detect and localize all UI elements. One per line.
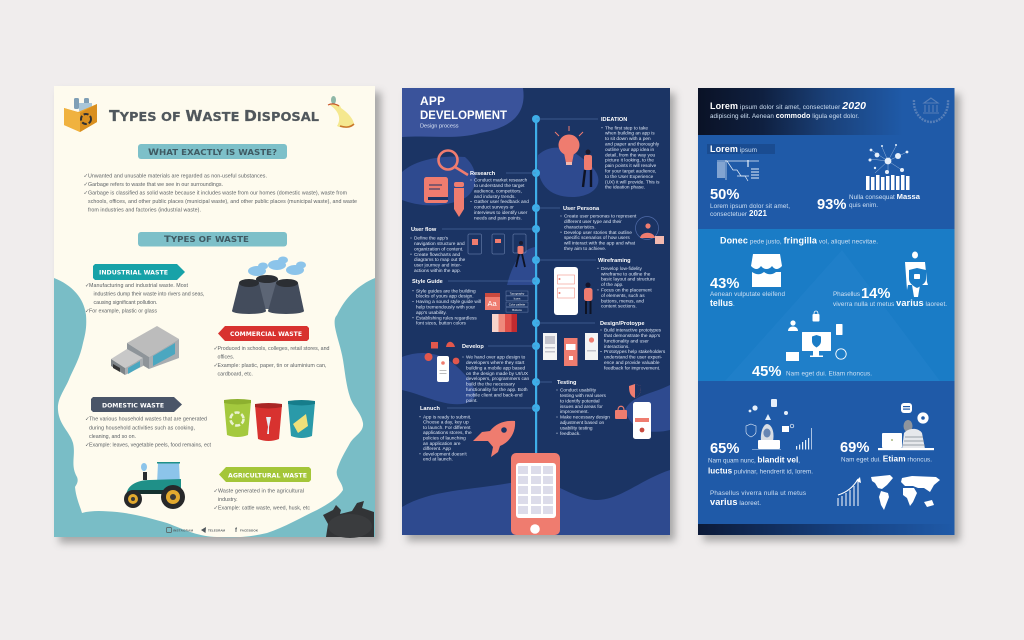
- step: testing: Make necessary design: [560, 415, 610, 421]
- step: user persona: specific scenarios of how users: [564, 235, 630, 241]
- stat: 14 percent: 14%: [861, 286, 890, 302]
- text block: what is waste bullets: schools, offices, and other public places (municipal waste), and other public places (municipal waste), and waste: [88, 199, 357, 205]
- step: user flow: actions within the app.: [414, 268, 461, 274]
- stat: 65 percent: 65%: [710, 441, 739, 457]
- stat: 50 percent: Lorem ipsum dolor sit amet,: [710, 203, 790, 210]
- step: research: and industry trends.: [474, 194, 516, 200]
- icon: style guide swatches: Aa: [488, 299, 498, 308]
- step: user persona: they aim to achieve.: [564, 246, 606, 252]
- step: research: to understand the target: [474, 183, 525, 189]
- text block: commercial waste: Produced in schools, colleges, retail stores, and: [218, 346, 330, 352]
- step: design prototype: interactions.: [604, 344, 630, 350]
- step: develop: We hand over app design to: [466, 355, 526, 361]
- panel: app development: [402, 88, 670, 535]
- icon: large smartphone: [511, 453, 560, 535]
- heading: types of waste: [138, 232, 287, 246]
- step: user persona: characteristics.: [564, 224, 596, 230]
- icon: develop phone and platforms: [424, 342, 459, 382]
- step: launch: an application are: [423, 441, 461, 447]
- icon: market stall: [751, 254, 782, 287]
- stat: 69 percent: 69%: [840, 440, 869, 456]
- step: user flow: Define the app's: [414, 236, 449, 242]
- step: design prototype: functionality and user: [604, 338, 649, 344]
- step: research: Research: [470, 171, 496, 177]
- text block: domestic waste: Example: leaves, vegetable peels, food remains, ect: [89, 442, 212, 448]
- timeline: [442, 115, 598, 454]
- step: style guide: [412, 279, 481, 327]
- text block: agricultural waste: ✓: [214, 506, 218, 512]
- list bullets for every step: [410, 127, 603, 454]
- stat: 45 percent: Nam eget dui. Etiam rhoncus.: [786, 371, 872, 378]
- step: user flow: user journey and inter-: [414, 263, 462, 269]
- step: launch: end at launch.: [423, 457, 453, 463]
- icon: style guide swatches: Typography: [510, 291, 525, 295]
- step: wireframing: Develop low-fidelity: [601, 266, 643, 272]
- step: launch: [420, 406, 472, 463]
- step: wireframing: of elements, such as: [601, 293, 645, 299]
- ribbon: commercial waste: COMMERCIAL WASTE: [230, 331, 302, 338]
- icon: apple core: [328, 96, 354, 127]
- step: develop: building a mobile app based: [466, 365, 526, 371]
- text block: industrial waste: ✓: [85, 283, 89, 289]
- section label: [707, 144, 775, 154]
- social footer: FACEBOOK: [240, 529, 259, 533]
- stat: 14 percent: viverra nulla ut metus varius laoreet.: [833, 298, 947, 308]
- stat: 43 percent: tellus.: [710, 298, 735, 308]
- text block: commercial waste: ✓: [214, 346, 218, 352]
- step: ideation: pain points it will resolve: [605, 163, 657, 169]
- step: ideation: and paper and thoroughly: [605, 142, 660, 148]
- step: ideation: the ideation phase.: [605, 185, 645, 191]
- title: [420, 94, 508, 130]
- ribbon: industrial waste: INDUSTRIAL WASTE: [99, 270, 168, 276]
- text block: agricultural waste: [214, 488, 310, 512]
- step: wireframing: Focus on the placement: [601, 288, 652, 294]
- icon: rising bars with arrow: [838, 477, 861, 506]
- step: design prototype: [600, 321, 666, 371]
- text block: agricultural waste: Example: cattle waste, weed, husk, etc: [218, 506, 310, 512]
- icon: hacker with laptop: [746, 399, 794, 450]
- step: launch: development doesn't: [423, 451, 467, 457]
- step: research: audience, competitors,: [474, 188, 522, 194]
- step: launch: Lanuch: [420, 406, 440, 412]
- icon: green recycling bin: [224, 399, 251, 437]
- icon: red glass bin: [255, 403, 282, 441]
- step: ideation: (UX) it will provide. This is: [605, 179, 660, 185]
- stat: 93 percent: 93%: [817, 197, 846, 213]
- icon: wireframe phone and person: [554, 267, 592, 315]
- icon: style guide swatches: Buttons: [512, 308, 522, 312]
- stat: 14 percent: [833, 286, 947, 308]
- heading: donec line: Donec pede justo, fringilla vol, aliquet necvitae.: [720, 236, 878, 246]
- panel: types of waste disposal: [54, 86, 375, 538]
- step: user flow: diagrams to map out the: [414, 257, 466, 263]
- text block: what is waste bullets: ✓: [84, 182, 88, 188]
- text block: domestic waste: [85, 417, 212, 448]
- text block: industrial waste: [85, 283, 204, 315]
- stat: 14 percent: Phasellus: [833, 291, 860, 298]
- step: user flow: Create flowcharts and: [414, 252, 461, 258]
- step: user persona: [563, 206, 637, 252]
- text block: what is waste bullets: from industries and factories (industrial waste).: [88, 208, 201, 214]
- step: user flow: [411, 227, 466, 274]
- step: testing: usability testing: [560, 425, 593, 431]
- text block: industrial waste: For example, plastic or glass: [89, 309, 157, 315]
- stat: 50 percent: consectetuer 2021: [710, 209, 768, 218]
- step: user persona: Develop user stories that outline: [564, 230, 632, 236]
- step: research: conduct surveys or: [474, 205, 514, 211]
- text block: agricultural waste: ✓: [214, 488, 218, 494]
- step: wireframing: wireframe to outline the: [601, 271, 651, 277]
- step: user flow: organization of content.: [414, 246, 463, 252]
- stat: 69 percent: [840, 440, 932, 464]
- text block: commercial waste: [214, 346, 330, 378]
- title: TYPES OF WASTE DISPOSAL: [109, 107, 319, 125]
- step: wireframing: Wireframing: [598, 258, 631, 264]
- text block: commercial waste: offices.: [218, 355, 234, 361]
- step: design prototype: Design/Protoype: [600, 321, 644, 327]
- step: design prototype: that demonstrate the app's: [604, 333, 661, 339]
- step: research: needs and pain points.: [474, 215, 522, 221]
- step: user persona: different user type and their: [564, 219, 622, 225]
- stat: 50 percent: 50%: [710, 187, 739, 203]
- step: testing: [557, 380, 610, 437]
- step: ideation: [601, 117, 660, 191]
- step: ideation: for your target audience,: [605, 168, 656, 174]
- icon: style guide swatches: Icons: [514, 296, 521, 300]
- section label: Lorem ipsum: [710, 144, 757, 154]
- step: launch: Choose a day, key up: [423, 420, 469, 426]
- step: wireframing: buttons, menus, and: [601, 298, 644, 304]
- ribbon: industrial waste: [93, 264, 185, 280]
- text block: what is waste bullets: Unwanted and unusable materials are regarded as non-useful substances.: [88, 174, 267, 180]
- stat: 50 percent: [710, 187, 790, 218]
- panel shadows: [59, 92, 960, 543]
- title: DEVELOPMENT: [420, 108, 508, 122]
- step: user persona: will interact with the app and what: [564, 241, 636, 247]
- title: APP: [420, 94, 445, 108]
- text block: industrial waste: ✓: [85, 309, 89, 315]
- icon: rocket: [473, 421, 515, 457]
- step: style guide: Having a sound style guide will: [416, 299, 481, 305]
- text block: commercial waste: ✓: [214, 363, 218, 369]
- step: testing: to identify potential: [560, 398, 600, 404]
- teal wavy background: [54, 278, 375, 537]
- icon: world map: [871, 475, 940, 510]
- step: testing: issues and areas for: [560, 404, 603, 410]
- icon: isometric building: [111, 326, 179, 375]
- header band: [698, 88, 954, 135]
- step: style guide: blocks of yours app design.: [416, 294, 474, 300]
- step: testing: improvement.: [560, 409, 589, 415]
- text block: agricultural waste: industry.: [218, 497, 238, 503]
- step: research: [470, 171, 529, 221]
- stat: 43 percent: Aenean vulputate eleifend: [710, 291, 785, 298]
- panel: blue lorem ipsum statistics: [698, 88, 954, 535]
- stat: 65 percent: Nam quam nunc, blandit vel,: [708, 454, 800, 464]
- icon: flow screens and person: [468, 234, 526, 267]
- step: user flow: User flow: [411, 227, 437, 233]
- faint triangle in middle band: [725, 250, 940, 381]
- icon: small bar chart: [796, 428, 812, 450]
- step: wireframing: content sections.: [601, 304, 637, 310]
- step: develop: point.: [466, 398, 478, 404]
- text block: phasellus: varius laoreet.: [710, 497, 761, 507]
- icon: secured computer: [786, 311, 846, 361]
- step: design prototype: Build interactive prototypes: [604, 328, 662, 334]
- title: Design process: [420, 124, 459, 130]
- text block: phasellus: [710, 490, 806, 507]
- stat: 45 percent: [752, 364, 872, 380]
- stat: 93 percent: quis enim.: [849, 202, 878, 209]
- step: style guide: Style guides are the building: [416, 288, 476, 294]
- stat: 43 percent: [710, 276, 785, 308]
- icon: declining chart: [717, 160, 759, 181]
- icon: teal organic bin: [288, 400, 315, 438]
- step: wireframing: [598, 258, 655, 310]
- step: testing: adjustment based on: [560, 420, 604, 426]
- heading: what exactly is waste: WHAT EXACTLY IS WASTE?: [148, 148, 277, 158]
- middle light-blue band: [698, 229, 954, 381]
- text block: what is waste bullets: Garbage refers to waste that we see in our surroundings.: [88, 182, 223, 188]
- step: style guide: app's usability.: [416, 310, 447, 316]
- text block: what is waste bullets: ✓: [84, 190, 88, 196]
- bottom wave: [402, 470, 670, 535]
- ribbon: domestic waste: [91, 397, 182, 412]
- step: style guide: help tremendously with your: [416, 304, 476, 310]
- icon: bank emblem: [914, 98, 948, 122]
- text block: domestic waste: during household activities such as cooking,: [89, 425, 195, 431]
- step: launch: policies of launching: [423, 436, 466, 442]
- text block: what is waste bullets: Garbage is classified as solid waste because it includes waste from our homes (domestic waste), waste from: [88, 190, 348, 196]
- icon: recycling box: [64, 98, 97, 132]
- step: style guide: Style Guide: [412, 279, 443, 285]
- text block: domestic waste: ✓: [85, 442, 89, 448]
- text block: what is waste bullets: ✓: [84, 174, 88, 180]
- stat: 93 percent: Nulla consequat Massa: [849, 192, 921, 201]
- icon: factory smokestacks: [232, 256, 306, 314]
- step: develop: functionality for the app. Both: [466, 387, 528, 393]
- text block: domestic waste: The various household wastes that are generated: [89, 417, 207, 423]
- text block: agricultural waste: Waste generated in the agricultural: [218, 488, 304, 494]
- social footer: INSTAGRAM: [173, 529, 194, 533]
- step: develop: on the design made by UI/UX: [466, 371, 529, 377]
- ribbon: agricultural waste: AGRICULTURAL WASTE: [228, 472, 307, 480]
- icon: style guide swatches: Color pallette: [509, 302, 526, 306]
- icon: guard with shield: [905, 252, 928, 297]
- step: launch: to launch. For different: [423, 425, 471, 431]
- text block: phasellus: Phasellus viverra nulla ut metus: [710, 490, 806, 497]
- step: develop: developers where they start: [466, 360, 525, 366]
- text block: industrial waste: industries dump their waste into rivers and seas,: [94, 292, 204, 298]
- step: ideation: when building an app is: [605, 131, 655, 137]
- step: research: interviews to identify user: [474, 210, 528, 216]
- header text: [710, 100, 866, 120]
- icon: style guide swatches: [485, 291, 528, 332]
- ribbon: agricultural waste: [219, 467, 311, 482]
- step: research: Conduct market research: [474, 178, 528, 184]
- step: develop: mobile client and back-end: [466, 392, 523, 398]
- step: develop: [462, 344, 529, 404]
- icon: garbage bags: [323, 501, 374, 538]
- step: testing: feedback.: [560, 431, 581, 437]
- step: ideation: to the User Experience: [605, 174, 654, 180]
- social footer: TELEGRAM: [208, 529, 226, 533]
- step: develop: developers, programmers can: [466, 376, 529, 382]
- step: testing: Testing: [557, 380, 577, 386]
- step: research: Gather user feedback and: [474, 199, 529, 205]
- stat: 69 percent: Nam eget dui. Etiam rhoncus.: [841, 454, 932, 464]
- text block: industrial waste: Manufacturing and industrial waste. Most: [89, 283, 189, 289]
- ribbon: domestic waste: DOMESTIC WASTE: [102, 402, 164, 410]
- text block: what is waste bullets: [84, 174, 357, 214]
- step: testing: testing with real users: [560, 393, 607, 399]
- step: user persona: User Persona: [563, 206, 600, 212]
- header text: Lorem ipsum dolor sit amet, consectetuer 2020: [710, 100, 866, 112]
- step: ideation: outline your app idea in: [605, 147, 654, 153]
- step: launch: App is ready to submit.: [423, 414, 471, 420]
- icon: lightbulb and person: [555, 126, 592, 187]
- stat: 93 percent: [817, 192, 921, 213]
- bottom dark band: [698, 524, 954, 535]
- icon: shield, lock and phone: [615, 384, 651, 439]
- step: design prototype: understand the user experi-: [604, 355, 663, 361]
- step: style guide: Establishing rules regardless: [416, 315, 477, 321]
- text block: domestic waste: cleaning, and so on.: [89, 434, 136, 440]
- text block: commercial waste: cardboard, etc.: [218, 372, 253, 378]
- text block: commercial waste: Example: plastic, paper, tin or aluminium can,: [218, 363, 326, 369]
- step: develop: build the the necessary: [466, 382, 515, 388]
- step: wireframing: basic layout and structure: [601, 277, 655, 283]
- heading: types of waste: TYPES OF WASTE: [164, 235, 249, 245]
- text block: domestic waste: ✓: [85, 417, 89, 423]
- step: design prototype: feedback for improvement.: [604, 365, 660, 371]
- text block: industrial waste: causing significant pollution.: [94, 300, 158, 306]
- social footer: f: [235, 528, 238, 534]
- step: design prototype: ence and provide valuable: [604, 360, 660, 366]
- step: ideation: The first step to take: [605, 125, 648, 131]
- icon: persona portrait: [636, 216, 664, 244]
- step: design prototype: Prototypes help stakeholders: [604, 349, 666, 355]
- step: wireframing: of the app.: [601, 282, 623, 288]
- stat: 43 percent: 43%: [710, 276, 739, 292]
- step: ideation: to sit down with a pen: [605, 136, 651, 142]
- step: ideation: detail, from the way you: [605, 152, 656, 158]
- icon: tractor: [124, 462, 185, 509]
- icon: network of people: [866, 144, 910, 190]
- step: user persona: Create user personas to represent: [564, 214, 637, 220]
- social footer: [166, 527, 259, 534]
- decorative blobs: [402, 148, 670, 432]
- header text: adipiscing elit. Aenean commodo ligula eget dolor.: [710, 111, 859, 120]
- stat: 65 percent: luctus pulvinar, hendrerit id, lorem.: [708, 466, 813, 476]
- heading: what exactly is waste: [138, 144, 287, 159]
- icon: magnifier, book and pencil: [424, 150, 468, 217]
- stat: 45 percent: 45%: [752, 364, 781, 380]
- stat: 65 percent: [708, 441, 813, 476]
- step: testing: Conduct usability: [560, 388, 597, 394]
- step: ideation: picture it looking, to the: [605, 158, 654, 164]
- step: launch: applications stores, the: [423, 430, 472, 436]
- step: user flow: navigation structure and: [414, 241, 465, 247]
- header blob: [402, 88, 524, 137]
- icon: prototype phones: [543, 333, 598, 366]
- step: develop: Develop: [462, 344, 484, 350]
- step: style guide: font sizes, button colors: [416, 321, 467, 327]
- ribbon: commercial waste: [218, 326, 309, 341]
- icon: person at laptop with chat bubbles: [878, 403, 934, 450]
- step: launch: different. App: [423, 446, 451, 452]
- step: ideation: IDEATION: [601, 117, 627, 123]
